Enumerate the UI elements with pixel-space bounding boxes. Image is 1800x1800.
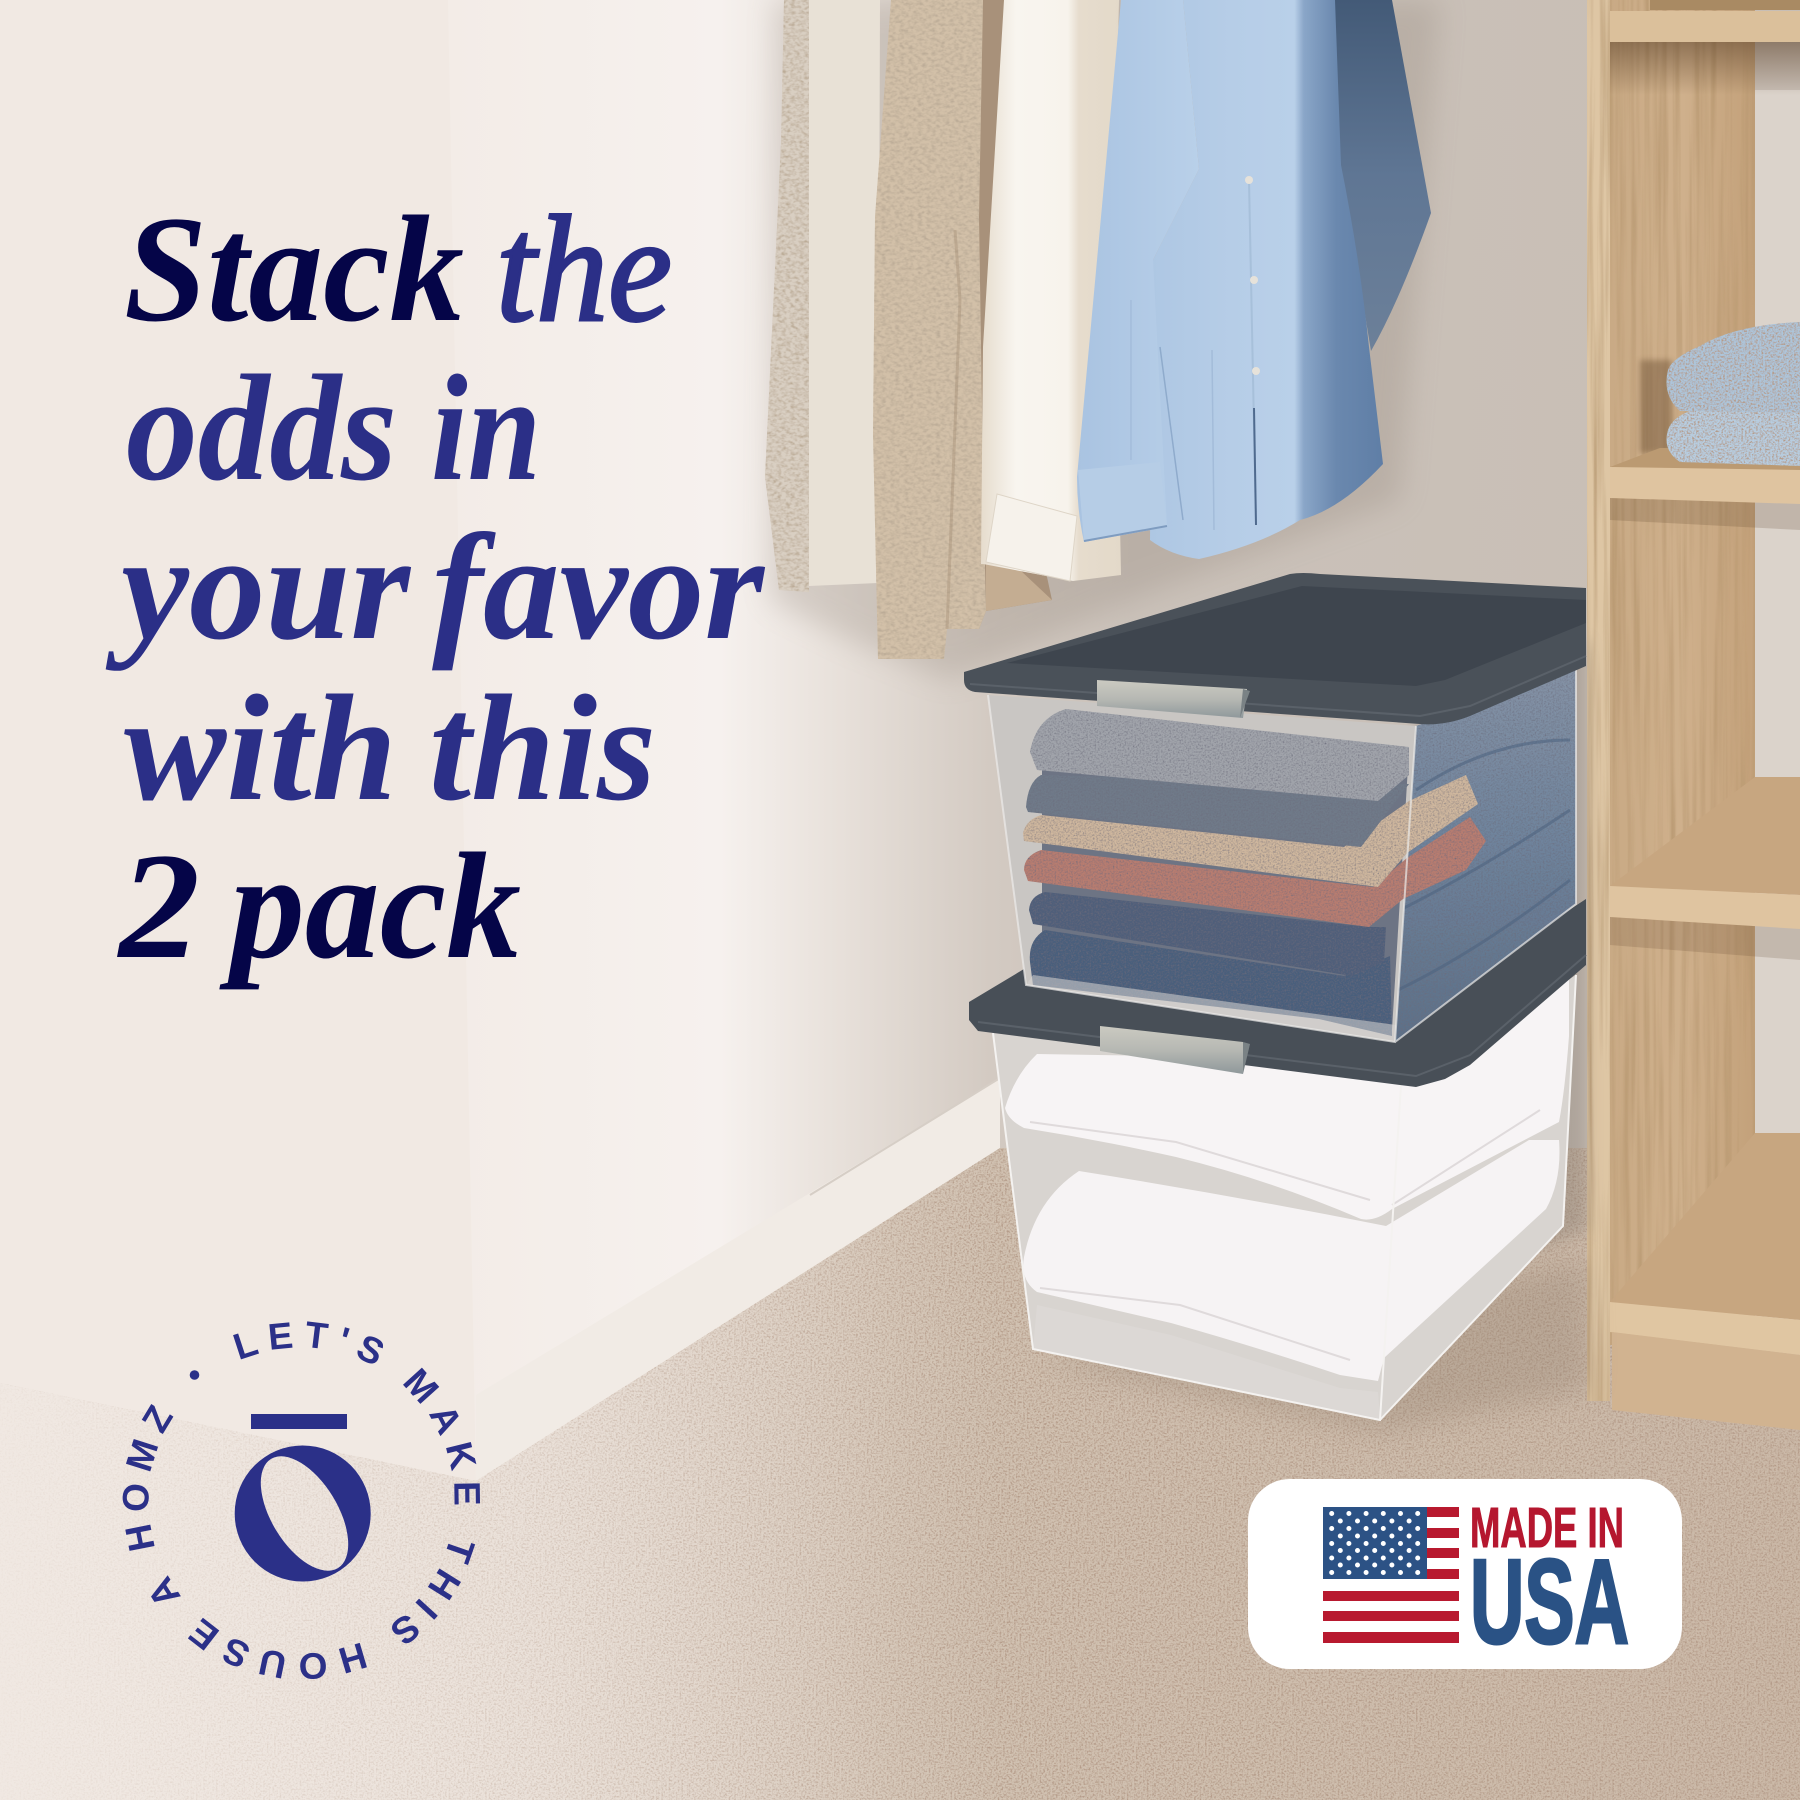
carpet left fade [0, 1148, 1000, 1800]
line 1: Stack [124, 185, 464, 353]
dark navy fold [1030, 930, 1392, 1036]
cream knit garment [765, 0, 880, 592]
lower box edge highlights [993, 975, 1576, 1420]
upper lid [964, 573, 1586, 724]
hanging clothes [765, 0, 1440, 680]
lower pillow [1023, 1140, 1559, 1381]
USA text: USA [1470, 1535, 1629, 1669]
tan fold [1023, 775, 1478, 887]
lower lid [969, 899, 1586, 1087]
circular brand logo [122, 1321, 480, 1679]
wall corner crease [0, 0, 476, 1481]
shelf with towels [1610, 322, 1800, 530]
line 5: 2 [117, 822, 200, 990]
upper box translucent veil [1026, 975, 1396, 1042]
line 3: your [105, 503, 412, 671]
slate fold [1026, 775, 1409, 847]
shirt placket [1249, 180, 1256, 525]
made in USA badge [1248, 1479, 1682, 1669]
back wall inside shelf [1755, 90, 1800, 1340]
wooden shelving unit [1587, 0, 1800, 1430]
line 4 [124, 664, 656, 832]
shelf side panel [1610, 0, 1755, 1345]
line 4: this [429, 664, 656, 832]
logo macron bar [251, 1414, 347, 1429]
clothes wall shadow [770, 0, 1440, 680]
lower box base [1033, 1305, 1380, 1420]
logo letter o [235, 1446, 371, 1582]
wall behind boxes shadow [1400, 640, 1587, 1300]
ring text: LET'S MAKE THIS HOUSE A HOMZ [122, 1321, 480, 1679]
lower box with pillows [993, 975, 1576, 1420]
line 5: pack [219, 822, 521, 990]
line 1 [124, 185, 672, 353]
storage boxes [964, 573, 1590, 1432]
upper lid clip [1097, 680, 1250, 718]
shirt buttons [1245, 176, 1260, 375]
blouse cuff [986, 494, 1077, 581]
fold stack backing [1042, 730, 1409, 1030]
shelf plinth [1612, 1332, 1800, 1430]
lower box body [993, 975, 1576, 1420]
baseboard [476, 1078, 1000, 1481]
tan sweater [873, 0, 1052, 659]
top shadow [1610, 40, 1800, 95]
lower lid clip [1100, 1026, 1250, 1074]
upper lid recess [1007, 586, 1586, 686]
upper box body [988, 669, 1576, 1042]
front post [1587, 0, 1610, 1401]
line 2 [126, 344, 541, 512]
upper pillow [1005, 975, 1569, 1220]
dark blue shirt back [1330, 0, 1431, 351]
upper box back panel [988, 695, 1416, 1042]
made in text: MADE IN [1470, 1496, 1624, 1560]
ring dot [190, 1370, 199, 1380]
top shelf [1610, 11, 1800, 42]
shirt sleeve [1077, 0, 1199, 542]
lower towel [1666, 411, 1800, 466]
upper towel [1666, 322, 1800, 413]
upper box outlines [988, 669, 1576, 1042]
navy fold [1029, 892, 1386, 976]
carpet floor [0, 1148, 1800, 1800]
line 1: the [496, 185, 672, 353]
gray fold [1030, 709, 1409, 801]
middle shelf [1610, 777, 1800, 960]
pillow seams [1030, 1110, 1540, 1360]
woven basket [1650, 0, 1800, 10]
headline [105, 185, 766, 990]
lower shelf [1610, 1133, 1800, 1355]
upper box rear folds [1398, 740, 1570, 990]
line 2: odds [126, 344, 397, 512]
rust fold [1024, 817, 1486, 927]
sweater ribbed hem [986, 560, 1052, 611]
floor shadow [1040, 1260, 1590, 1432]
white blouse [981, 0, 1121, 581]
line 3 [105, 503, 766, 671]
upper box side contents [1395, 669, 1576, 1042]
blue shirt body [1150, 0, 1383, 559]
badge background [1248, 1479, 1682, 1669]
line 3: favor [432, 503, 766, 671]
US flag [1323, 1507, 1459, 1643]
line 4: with [124, 664, 397, 832]
line 2: in [431, 344, 541, 512]
